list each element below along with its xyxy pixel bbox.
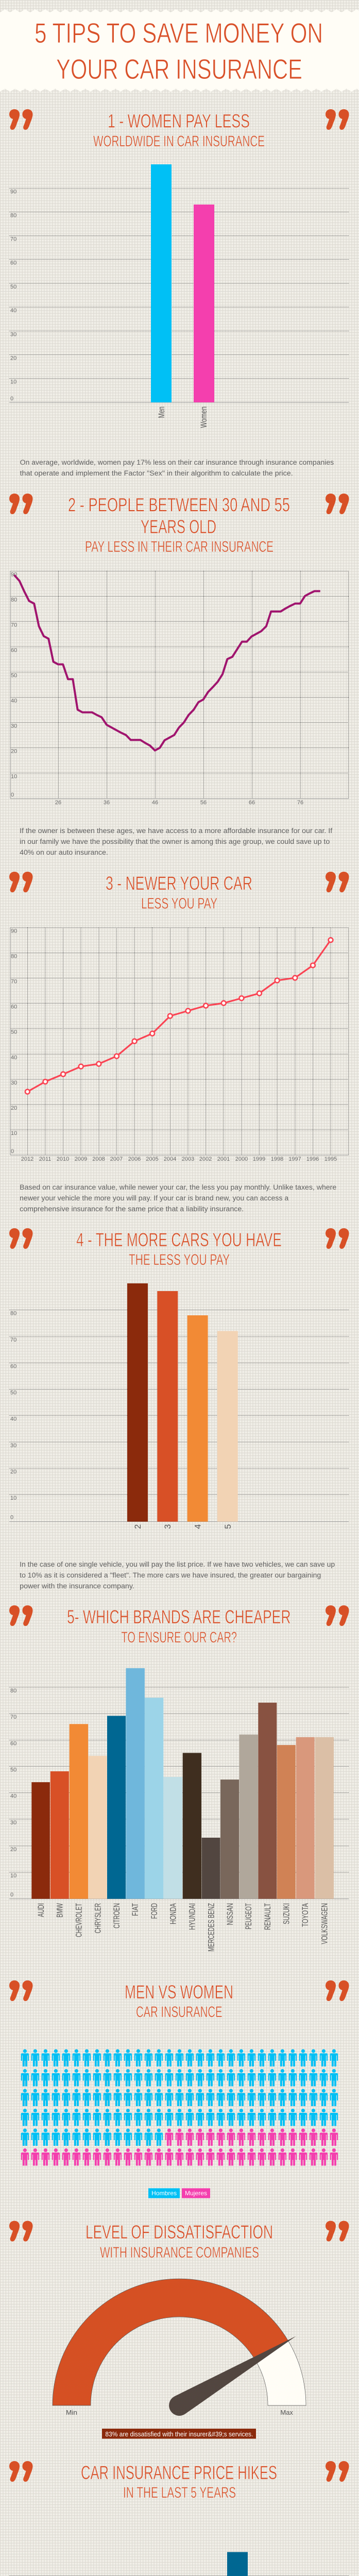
bar chart: car brands: BMW: [56, 1903, 65, 1918]
bar chart: men vs women: 50: [10, 284, 16, 290]
line chart: cost by car year: 10: [11, 1130, 17, 1137]
bar chart: number of cars: 40: [10, 1416, 16, 1422]
bar chart: car brands: FIAT: [131, 1903, 140, 1916]
bar chart: car brands: 60: [10, 1740, 16, 1747]
line chart: cost by car year: 2010: [57, 1156, 69, 1162]
bar chart: men vs women: 30: [10, 332, 16, 338]
icon: quote left: [9, 1980, 33, 2001]
body text: If the owner is between these ages, we have access to a more affordable insurance for our car. If: [20, 827, 332, 835]
body text: On average, worldwide, women pay 17% less on their car insurance through insurance companies: [20, 459, 334, 466]
line chart: cost by car year: 1997: [288, 1156, 301, 1162]
bar chart: men vs women: Men: [157, 406, 166, 418]
icon: quote right: [326, 2221, 349, 2242]
icon: quote right: [326, 1605, 349, 1626]
line chart: cost by age: 36: [104, 800, 110, 806]
bar chart: number of cars: 70: [10, 1337, 16, 1343]
body text: 40% on our auto insurance.: [20, 849, 108, 856]
icon: quote right: [326, 1980, 349, 2001]
line chart: cost by car year: 2009: [75, 1156, 87, 1162]
subheading: IN THE LAST 5 YEARS: [123, 2484, 236, 2501]
bar chart: number of cars: [9, 1283, 349, 1529]
subheading: THE LESS YOU PAY: [129, 1251, 230, 1268]
heading: LEVEL OF DISSATISFACTION: [86, 2222, 273, 2243]
line chart: cost by car year: [10, 927, 349, 1162]
gauge needle: [169, 2336, 296, 2416]
line chart: cost by age: 90: [11, 572, 17, 578]
panel: brands: [9, 1605, 349, 1952]
bar chart: car brands: SUZUKI: [282, 1903, 292, 1924]
bar chart: car brands: CHRYSLER: [93, 1903, 102, 1933]
bar chart: men vs women: 90: [10, 189, 16, 195]
legend: [148, 2188, 210, 2198]
line chart: cost by car year: 1999: [253, 1156, 265, 1162]
icon: quote left: [9, 494, 33, 514]
subheading: PAY LESS IN THEIR CAR INSURANCE: [85, 538, 273, 555]
line chart: cost by age: 60: [11, 647, 17, 653]
line chart: cost by age: [10, 571, 349, 806]
bar chart: number of cars: 5: [224, 1524, 233, 1529]
panel: price hikes: [9, 2461, 349, 2576]
line chart: cost by age: 46: [152, 800, 158, 806]
body text: Based on car insurance value, while newer your car, the less you pay monthly. Unlike taxes, where: [20, 1183, 336, 1191]
panel: men vs women: [9, 1980, 349, 2198]
heading: 3 - NEWER YOUR CAR: [106, 873, 252, 894]
bar chart: car brands: [9, 1668, 349, 1952]
heading: CAR INSURANCE PRICE HIKES: [81, 2462, 277, 2483]
body text: [20, 1183, 336, 1213]
heading: 1 - WOMEN PAY LESS: [108, 110, 250, 132]
bar chart: car brands: 0: [10, 1892, 13, 1898]
bar chart: car brands: 30: [10, 1820, 16, 1826]
bar chart: car brands: NISSAN: [226, 1903, 235, 1925]
panel: dissatisfaction: [9, 2221, 349, 2439]
bar chart: men vs women: Women: [199, 406, 209, 428]
bar chart: car brands: CHEVROLET: [74, 1903, 83, 1937]
panel: more cars: [9, 1228, 349, 1590]
line chart: cost by car year: 2002: [199, 1156, 212, 1162]
bar chart: car brands: 10: [10, 1873, 16, 1879]
line chart: cost by age: 10: [11, 774, 17, 780]
bar chart: number of cars: 10: [10, 1495, 16, 1501]
bar chart: car brands: AUDI: [37, 1903, 46, 1917]
body text: [20, 1561, 335, 1590]
body text: newer your vehicle the more you will pay. If your car is brand new, you can access a: [20, 1194, 289, 1202]
heading: MEN VS WOMEN: [125, 1981, 233, 2003]
bar chart: men vs women: 60: [10, 260, 16, 266]
body text: to 10% as it is considered a "fleet". The more cars we have insured, the greater our bargaining: [20, 1571, 321, 1579]
line chart: cost by age: 30: [11, 723, 17, 730]
legend: Hombres: [151, 2190, 177, 2197]
line chart: cost by car year: 2005: [146, 1156, 159, 1162]
subheading: WITH INSURANCE COMPANIES: [100, 2244, 259, 2261]
pictogram: people: [20, 2049, 339, 2168]
legend: Mujeres: [185, 2190, 207, 2197]
body text: that operate and implement the Factor "Sex" in their algorithm to calculate the price.: [20, 469, 293, 477]
line chart: cost by age: 80: [11, 597, 17, 603]
line chart: cost by car year: 1995: [324, 1156, 337, 1162]
line chart: cost by car year: 90: [11, 928, 17, 935]
line chart: cost by car year: 2000: [235, 1156, 248, 1162]
line chart: cost by age: 66: [249, 800, 255, 806]
line chart: cost by car year: 80: [11, 953, 17, 959]
bar chart: car brands: FORD: [150, 1903, 159, 1919]
heading: 4 - THE MORE CARS YOU HAVE: [76, 1229, 282, 1250]
bar chart: car brands: MERCEDES BENZ: [207, 1903, 216, 1952]
bar chart: men vs women: 0: [10, 396, 13, 402]
body text: In the case of one single vehicle, you will pay the list price. If we have two vehicles, we can save up: [20, 1561, 335, 1568]
panel: newer car: [9, 872, 349, 1213]
bar chart: car brands: RENAULT: [263, 1903, 272, 1930]
icon: quote right: [326, 2461, 349, 2482]
icon: quote left: [9, 1228, 33, 1249]
icon: quote left: [9, 872, 33, 892]
line chart: cost by car year: 2006: [128, 1156, 141, 1162]
icon: quote right: [326, 109, 349, 130]
icon: quote right: [326, 494, 349, 514]
line chart: cost by age: 76: [297, 800, 303, 806]
body text: [20, 459, 334, 477]
bar chart: number of cars: 60: [10, 1363, 16, 1369]
bar chart: number of cars: 80: [10, 1311, 16, 1317]
bar chart: number of cars: 4: [194, 1524, 203, 1529]
line chart: cost by car year: 40: [11, 1055, 17, 1061]
body text: comprehensive insurance for the same price that a liability insurance.: [20, 1205, 244, 1213]
bar chart: car brands: CITROEN: [112, 1903, 122, 1928]
title: [35, 17, 323, 85]
icon: quote left: [9, 1605, 33, 1626]
bar chart: car brands: 50: [10, 1767, 16, 1773]
bar chart: car brands: VOLKSWAGEN: [320, 1903, 329, 1944]
body text: power with the insurance company.: [20, 1582, 134, 1590]
bar chart: number of cars: 0: [10, 1515, 13, 1521]
line chart: cost by car year: 2012: [21, 1156, 33, 1162]
line chart: cost by car year: 2008: [92, 1156, 105, 1162]
icon: quote left: [9, 109, 33, 130]
line chart: cost by car year: 2011: [39, 1156, 51, 1162]
bar chart: men vs women: [9, 164, 349, 428]
subheading: TO ENSURE OUR CAR?: [122, 1629, 237, 1646]
body text: [20, 827, 332, 856]
panel: women pay less: [9, 109, 349, 477]
bar chart: car brands: 70: [10, 1714, 16, 1720]
icon: quote right: [326, 1228, 349, 1249]
icon: quote right: [326, 872, 349, 892]
bar chart: number of cars: 2: [133, 1524, 143, 1529]
bar chart: men vs women: 10: [10, 379, 16, 385]
body text: in our family we have the possibility that the owner is among this age group, we could save up to: [20, 838, 330, 845]
bar chart: yearly hikes: [9, 2552, 349, 2576]
bar chart: car brands: HYUNDAI: [187, 1903, 197, 1930]
line chart: cost by car year: 50: [11, 1029, 17, 1036]
bar chart: number of cars: 20: [10, 1469, 16, 1475]
line chart: cost by car year: 1998: [271, 1156, 283, 1162]
line chart: cost by age: 26: [55, 800, 61, 806]
line chart: cost by age: 20: [11, 748, 17, 754]
bar chart: men vs women: 20: [10, 355, 16, 362]
gauge chart: [53, 2279, 306, 2416]
line chart: cost by car year: 0: [11, 1148, 14, 1155]
gauge chart: Max: [280, 2409, 294, 2416]
line chart: cost by age: 70: [11, 622, 17, 629]
line chart: cost by car year: 70: [11, 979, 17, 985]
bar chart: number of cars: 3: [163, 1524, 173, 1529]
bar chart: number of cars: 50: [10, 1390, 16, 1396]
bar chart: car brands: 20: [10, 1846, 16, 1853]
line chart: cost by car year: 2007: [110, 1156, 123, 1162]
line chart: cost by car year: 2004: [164, 1156, 176, 1162]
icon: quote left: [9, 2461, 33, 2482]
bar chart: men vs women: 80: [10, 212, 16, 218]
heading: YEARS OLD: [141, 516, 216, 537]
gauge chart: Min: [66, 2409, 77, 2416]
gauge caption: [102, 2429, 256, 2439]
line chart: cost by age: 0: [11, 792, 14, 798]
line chart: cost by car year: 20: [11, 1105, 17, 1111]
subheading: WORLDWIDE IN CAR INSURANCE: [93, 133, 265, 150]
icon: quote left: [9, 2221, 33, 2242]
line chart: cost by car year: 30: [11, 1080, 17, 1086]
bar chart: number of cars: 30: [10, 1443, 16, 1449]
bar chart: car brands: HONDA: [169, 1903, 178, 1924]
line chart: cost by age: 40: [11, 698, 17, 704]
line chart: cost by age: 50: [11, 673, 17, 679]
subheading: LESS YOU PAY: [141, 895, 217, 912]
gauge caption: 83% are dissatisfied with their insurer&#39;s services.: [105, 2431, 253, 2438]
line chart: cost by car year: 1996: [306, 1156, 319, 1162]
bar chart: car brands: TOYOTA: [301, 1903, 310, 1927]
subheading: CAR INSURANCE: [136, 2004, 223, 2021]
bar chart: men vs women: 40: [10, 308, 16, 314]
panel: age: [9, 494, 349, 856]
header banner: [0, 9, 359, 92]
heading: [68, 495, 290, 537]
bar chart: car brands: 80: [10, 1688, 16, 1694]
line chart: cost by car year: 60: [11, 1004, 17, 1010]
bar chart: car brands: 40: [10, 1793, 16, 1799]
bar chart: men vs women: 70: [10, 236, 16, 242]
bar chart: car brands: PEUGEOT: [244, 1903, 253, 1929]
line chart: cost by car year: 2001: [217, 1156, 230, 1162]
line chart: cost by car year: 2003: [182, 1156, 194, 1162]
line chart: cost by age: 56: [200, 800, 207, 806]
